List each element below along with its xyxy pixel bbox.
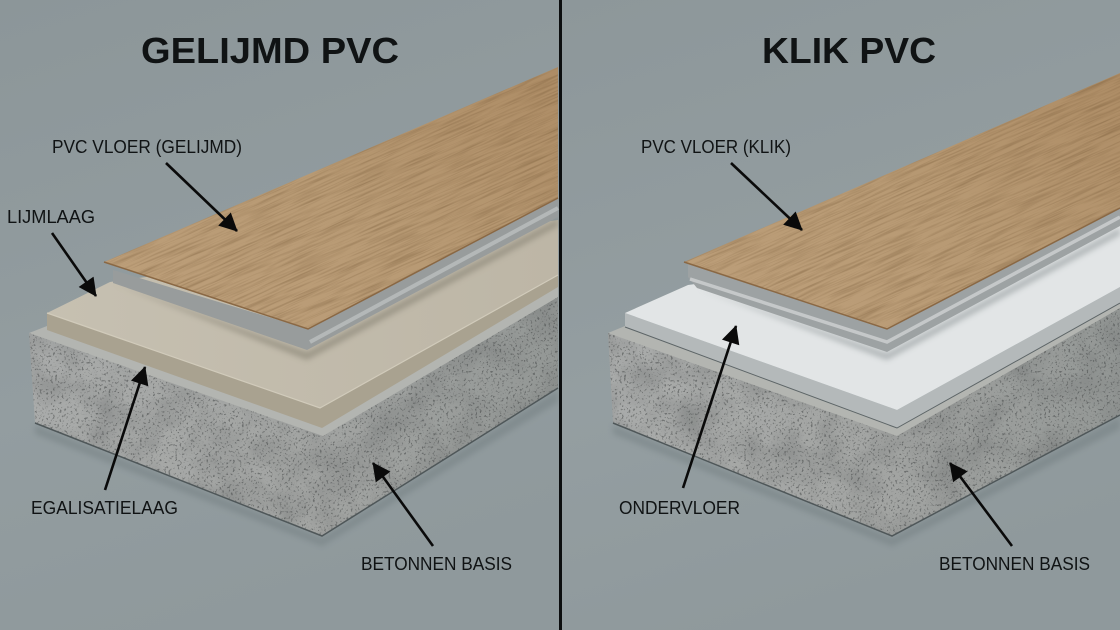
wood plank top, right <box>684 73 1120 330</box>
title: gelijmd PVC: GELIJMD PVC <box>141 30 399 71</box>
label: egalisatielaag: EGALISATIELAAG <box>31 497 178 518</box>
concrete base, right <box>600 290 1120 546</box>
wood plank top, left <box>104 67 558 330</box>
panel: gelijmd PVC <box>8 38 559 570</box>
arrow: ondervloer <box>683 326 736 488</box>
arrow: egalisatielaag <box>105 367 145 490</box>
divider <box>559 0 562 630</box>
label: ondervloer: ONDERVLOER <box>619 497 740 518</box>
arrow: lijmlaag <box>52 233 96 296</box>
concrete base, left <box>20 285 560 546</box>
click plank gray side, right <box>688 208 1120 360</box>
panel: klik PVC <box>608 38 1120 570</box>
arrow: betonnen basis, right <box>950 463 1012 546</box>
glue layer shadow and gray plank side, left <box>113 198 558 360</box>
label: PVC vloer klik: PVC VLOER (KLIK) <box>641 136 791 157</box>
underlayment, right <box>625 226 1120 428</box>
arrow: betonnen basis, left <box>373 463 433 546</box>
label: PVC vloer gelijmd: PVC VLOER (GELIJMD) <box>52 136 242 157</box>
left floor background <box>0 0 559 630</box>
label: lijmlaag: LIJMLAAG <box>7 206 95 227</box>
leveling layer, left <box>47 220 558 428</box>
title: klik PVC: KLIK PVC <box>762 30 936 71</box>
arrow: PVC vloer klik <box>731 163 802 230</box>
label: betonnen basis, right: BETONNEN BASIS <box>939 553 1090 574</box>
right floor background <box>562 0 1120 630</box>
label: betonnen basis, left: BETONNEN BASIS <box>361 553 512 574</box>
arrow: PVC vloer gelijmd <box>166 163 237 231</box>
